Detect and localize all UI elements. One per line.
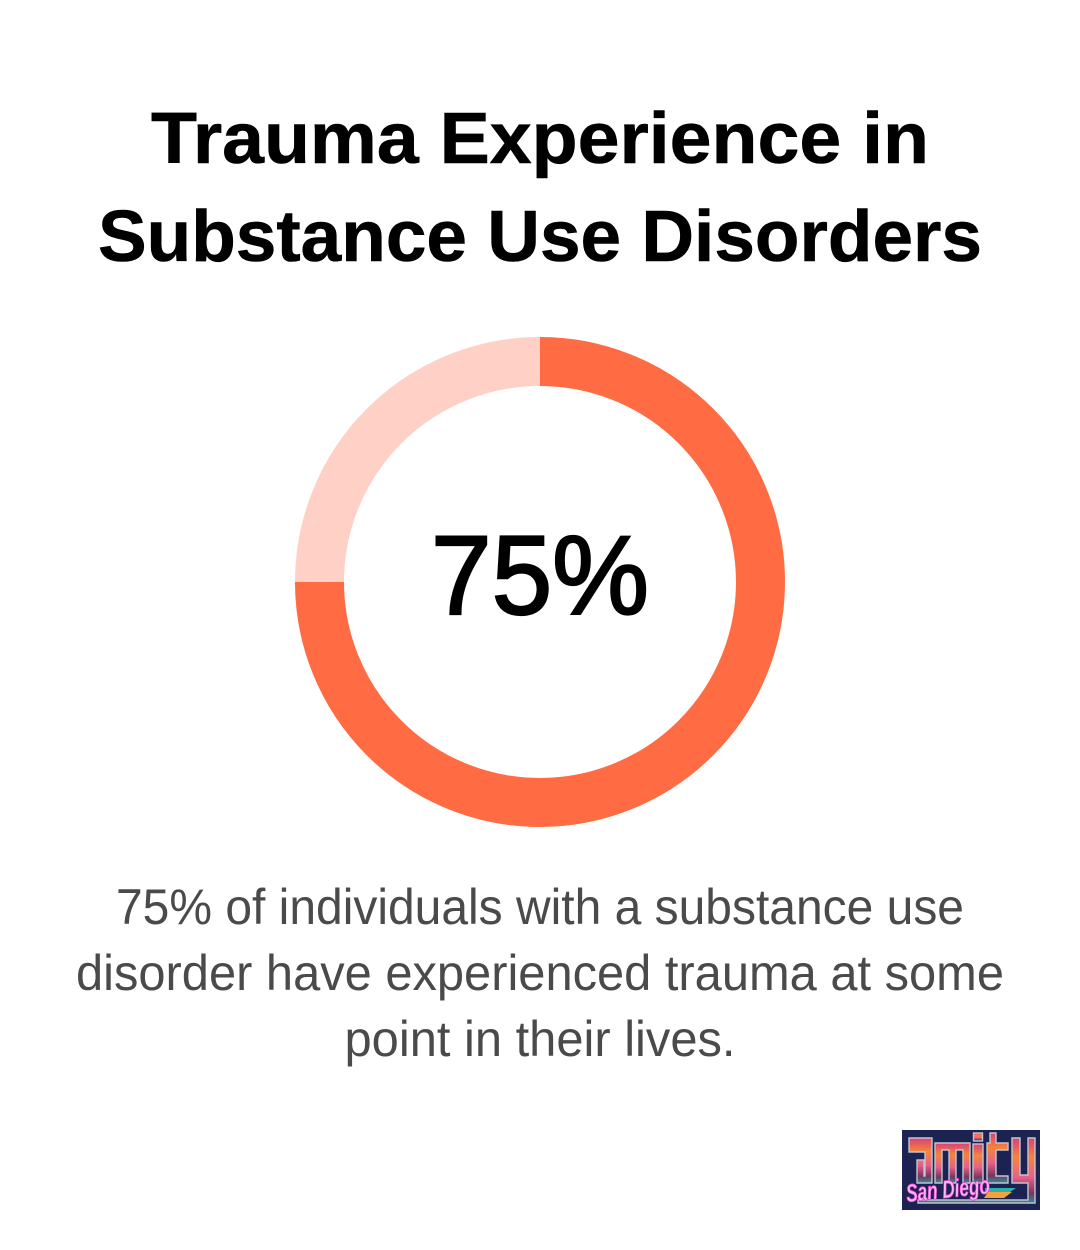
logo background (902, 1130, 1040, 1210)
description (76, 879, 1004, 1067)
title: Trauma Experience in (151, 99, 929, 179)
donut chart: 75% (320, 362, 760, 802)
logo: Amity San Diego (902, 1130, 1040, 1210)
donut track: remaining 25% (320, 362, 760, 802)
logo letters (909, 1133, 1035, 1203)
logo script text: San Diego (905, 1171, 991, 1208)
description: 75% of individuals with a substance use (116, 879, 964, 935)
center value: 75% (431, 513, 649, 638)
description: disorder have experienced trauma at some (76, 945, 1004, 1001)
title: Substance Use Disorders (98, 197, 982, 277)
description: point in their lives. (344, 1011, 736, 1067)
title (98, 99, 982, 277)
logo beach stripes (984, 1188, 1016, 1198)
donut value arc: 75% (320, 362, 760, 802)
